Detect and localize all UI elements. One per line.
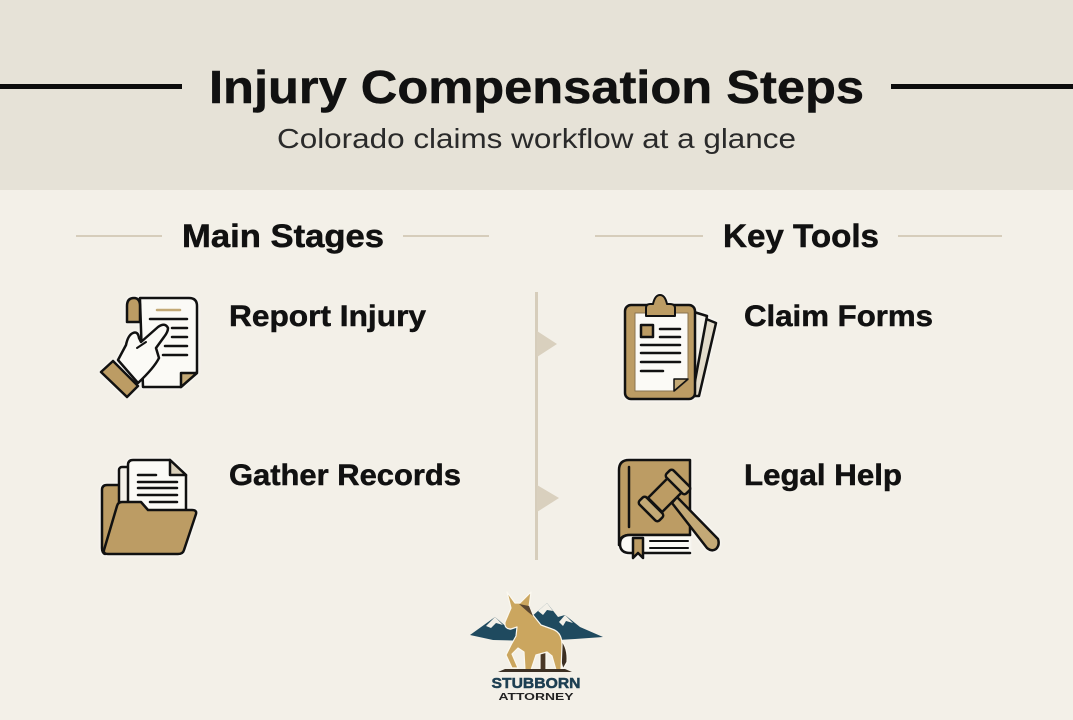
label: report injury: Report Injury [229, 300, 426, 333]
logo wordmark: STUBBORN [492, 675, 580, 692]
subtitle: Colorado claims workflow at a glance [277, 123, 796, 154]
logo donkey [505, 592, 567, 670]
logo mountains [470, 603, 603, 641]
title: Injury Compensation Steps [209, 61, 864, 113]
logo: Stubborn Attorney [470, 592, 603, 703]
section heading: main stages: Main Stages [182, 218, 384, 254]
label: claim forms: Claim Forms [744, 300, 933, 333]
logo: Stubborn Attorney: ATTORNEY [498, 691, 574, 703]
icon: law book with gavel [619, 460, 719, 558]
icon: clipboard with forms [625, 295, 716, 399]
icon: hand on document [101, 298, 197, 397]
section heading: key tools: Key Tools [723, 218, 879, 254]
label: gather records: Gather Records [229, 459, 461, 492]
icon: folder with records [102, 460, 196, 554]
header band [0, 0, 1073, 190]
center divider with arrows [535, 292, 559, 560]
label: legal help: Legal Help [744, 459, 902, 492]
